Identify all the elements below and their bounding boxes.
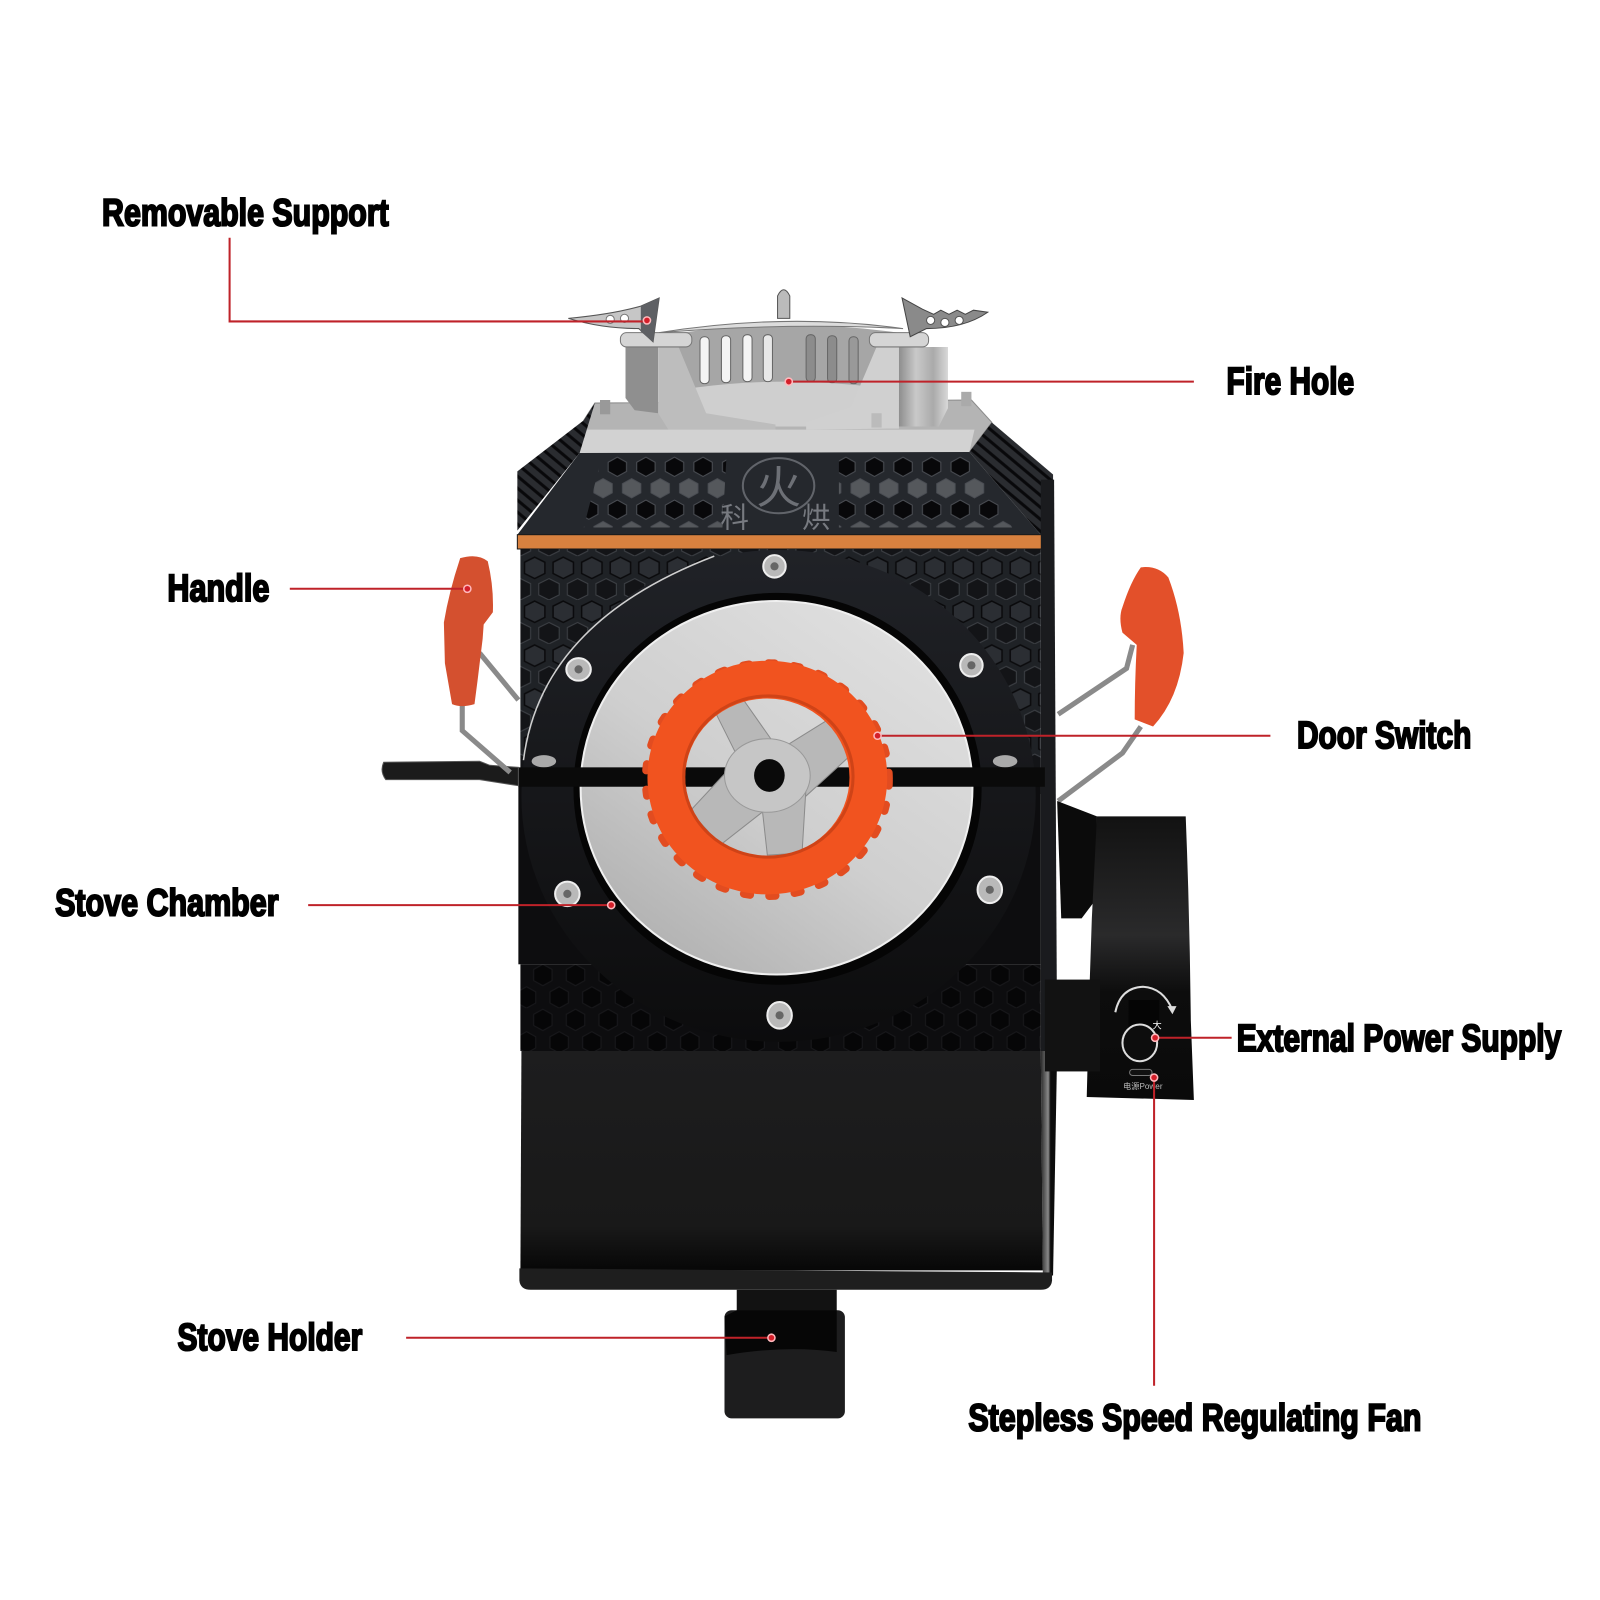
removable support left (568, 298, 659, 342)
speed knob: 大 (1153, 1020, 1162, 1031)
middle body panel (518, 786, 1041, 964)
hood hexagon holes left (584, 456, 726, 528)
right side edge (1041, 480, 1057, 1051)
copper strip (517, 535, 1042, 549)
removable support right (902, 298, 988, 337)
orange wheel ring (666, 680, 868, 876)
callout: Handle: Handle (167, 567, 269, 609)
silver door disc (581, 601, 972, 974)
hood logo (720, 458, 831, 535)
callout: Stepless Speed Regulating Fan: Stepless Speed Regulating Fan (968, 1397, 1421, 1439)
power mount block (1045, 980, 1100, 1071)
speed knob (1115, 987, 1177, 1061)
black door ring (521, 550, 1036, 1042)
lower hex panel (520, 964, 1041, 1051)
callout: Removable Support (102, 192, 651, 324)
right handle wires (1058, 645, 1141, 801)
callout: Removable Support: Removable Support (102, 192, 389, 234)
stove holder (724, 1290, 845, 1418)
callout: Door Switch: Door Switch (1297, 714, 1471, 756)
callout: Fire Hole (785, 360, 1354, 402)
ring highlight edge (523, 556, 714, 760)
left vent strip (517, 403, 595, 531)
silver top tray (580, 400, 992, 453)
power port and label (1123, 1069, 1163, 1091)
fan bracket (1057, 801, 1097, 918)
door bolts (532, 555, 1017, 1029)
door latch bar (382, 761, 1045, 787)
base plate (519, 1268, 1052, 1290)
orange wheel inner edge (684, 696, 853, 857)
ring inner shadow (573, 593, 982, 985)
hood hexagon holes right (837, 456, 1020, 530)
hood logo: 火 (756, 462, 801, 513)
callout: Stove Holder (178, 1316, 775, 1358)
left handle grip (444, 556, 493, 706)
callout: Stove Chamber: Stove Chamber (55, 881, 279, 923)
callout: Handle (167, 567, 471, 609)
upper hex panel (520, 549, 1041, 794)
stove machine illustration (382, 290, 1194, 1418)
right handle grip (1120, 567, 1184, 727)
hood logo: 科 (720, 503, 749, 535)
fire hole assembly (600, 290, 971, 430)
left handle wires (462, 653, 518, 772)
hood logo: 烘 (802, 503, 831, 535)
callout: Stove Holder: Stove Holder (178, 1316, 362, 1358)
power port and label: 电源Power (1123, 1081, 1163, 1091)
fan side unit (1087, 816, 1194, 1100)
lower body panel (520, 1051, 1043, 1270)
hood front panel (517, 452, 1041, 535)
cast hand wheel spokes (690, 699, 853, 855)
orange wheel teeth (646, 663, 889, 896)
tray front band (580, 430, 974, 453)
callout: Door Switch (874, 714, 1471, 756)
callout: Stepless Speed Regulating Fan (968, 1074, 1421, 1439)
right vent strip (969, 422, 1053, 535)
callout: Stove Chamber (55, 881, 615, 923)
right lower side strip (1041, 1051, 1057, 1276)
callout: Fire Hole: Fire Hole (1227, 360, 1354, 402)
